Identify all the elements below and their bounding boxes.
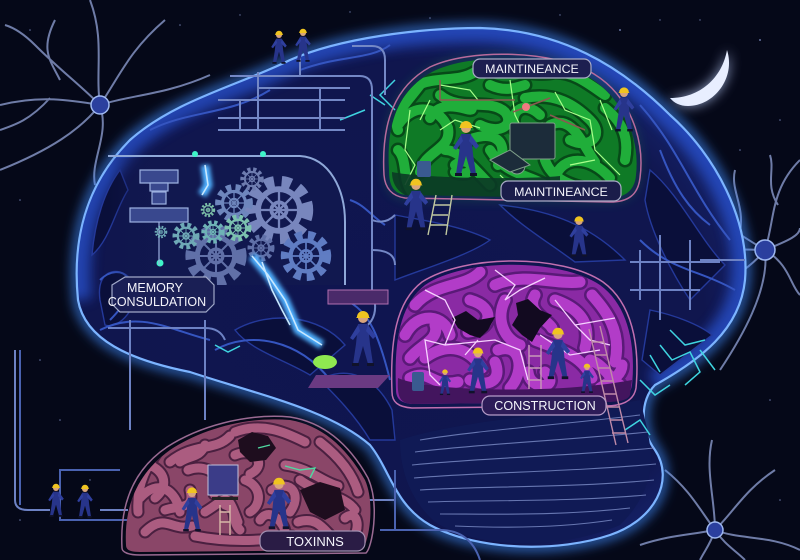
worker right of maintenance — [614, 87, 634, 131]
machine — [130, 170, 188, 265]
panel fill — [396, 265, 633, 404]
green status lights — [156, 151, 266, 266]
label: construction: CONSTRUCTION — [494, 399, 596, 413]
machine arm and red valve — [440, 80, 585, 130]
upper pipe block — [328, 290, 388, 304]
dark lobes — [92, 170, 725, 440]
purple gyri — [405, 272, 622, 388]
holes in the brain — [452, 299, 552, 342]
workers — [467, 348, 489, 393]
label: toxinns: TOXINNS — [286, 534, 344, 549]
brain glow — [77, 28, 745, 547]
worker on pipes — [569, 216, 589, 257]
panel background — [108, 158, 342, 285]
pink gyri — [138, 428, 358, 542]
panel: memory consolidation gears — [108, 151, 345, 345]
cerebellum shading — [400, 400, 651, 543]
brain outline — [77, 28, 745, 547]
panel glow — [389, 59, 637, 198]
label: memory consolidation: CONSULDATION — [108, 295, 206, 309]
crescent moon — [670, 50, 729, 106]
lightning — [202, 165, 322, 345]
lightning glow — [202, 165, 322, 345]
label: toxinns — [260, 531, 365, 551]
panel fill — [389, 59, 637, 198]
ladder — [589, 326, 628, 445]
worker with brush — [453, 121, 479, 176]
green spill — [313, 355, 337, 369]
label: maintenance bottom — [501, 181, 621, 201]
label: memory consolidation: MEMORY — [127, 281, 184, 295]
pipe network — [218, 46, 385, 300]
cerebellum ridges — [412, 415, 656, 527]
sweeping machine — [490, 123, 555, 174]
green gyri — [397, 69, 626, 192]
electric arcs — [405, 80, 620, 190]
label: maintenance top — [473, 59, 591, 78]
gear cluster — [156, 169, 327, 282]
panel border — [392, 261, 637, 408]
label: maintenance bottom: MAINTINEANCE — [514, 185, 608, 199]
brain body — [77, 28, 745, 547]
panel border — [122, 416, 374, 555]
small ladder — [529, 345, 541, 389]
panel border — [384, 54, 641, 202]
platform — [308, 375, 390, 388]
label: construction — [482, 396, 606, 415]
neuron bodies — [91, 96, 775, 538]
stage floor — [392, 172, 560, 198]
workers — [182, 487, 202, 531]
workers at the top — [271, 31, 287, 64]
label: memory consolidation — [108, 277, 214, 312]
worker cleaning on platform — [308, 290, 390, 388]
water bucket — [417, 161, 431, 177]
panel frame — [108, 156, 345, 285]
worker on ladder — [404, 179, 428, 230]
green toxin trace — [258, 445, 315, 478]
electric arcs — [425, 270, 615, 385]
brain silhouette — [77, 28, 745, 547]
holes — [238, 432, 345, 520]
stage floor — [398, 378, 632, 404]
label: maintenance top: MAINTINEANCE — [485, 62, 579, 76]
panel fill — [126, 419, 370, 552]
workers around the brain — [48, 29, 634, 518]
inner rim light — [77, 28, 745, 385]
panel: toxins pink brain — [122, 416, 374, 555]
ladder — [428, 195, 452, 235]
panel: construction purple brain — [392, 261, 637, 445]
workers lower left — [48, 484, 64, 517]
monitor on stand — [208, 465, 238, 535]
inner folds of the brain — [100, 45, 735, 380]
canister — [412, 372, 424, 391]
panel: maintenance green brain — [384, 54, 641, 202]
glowing cyan synapses — [215, 80, 715, 435]
